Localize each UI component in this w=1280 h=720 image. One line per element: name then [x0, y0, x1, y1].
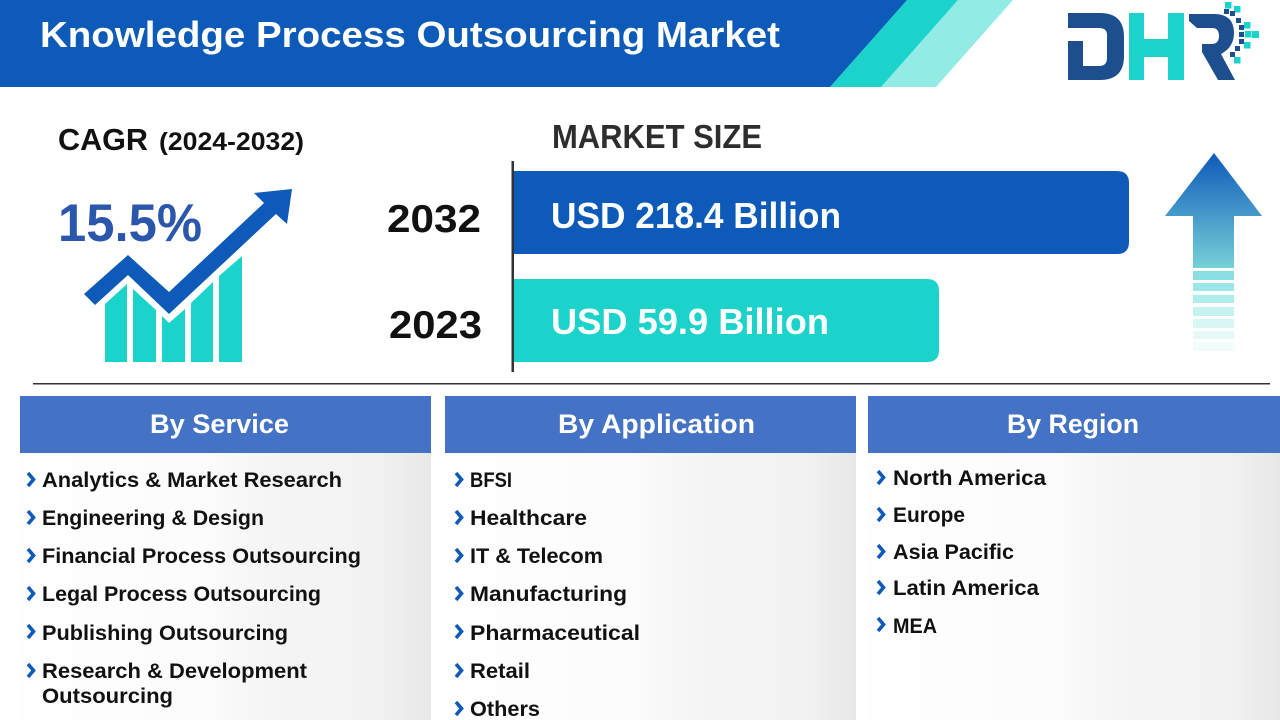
heading: by application: [445, 396, 856, 453]
bar 2032: USD 218.4 Billion: [551, 195, 841, 236]
panel: by application: [445, 396, 856, 720]
heading: by application: By Application: [558, 409, 755, 439]
logo letter H: [1129, 13, 1184, 80]
CAGR heading: CAGR: [58, 122, 148, 157]
item: publishing: Publishing Outsourcing: [42, 622, 288, 645]
item: pharmaceutical: Pharmaceutical: [470, 622, 640, 645]
item: engineering: Engineering & Design: [42, 507, 264, 530]
CAGR heading: [58, 122, 304, 157]
logo dots: [1224, 2, 1259, 64]
heading: by service: [20, 396, 431, 453]
icon bars: [105, 256, 242, 362]
icon trend arrow: [84, 189, 292, 314]
divider: [33, 383, 1270, 384]
item: legal: Legal Process Outsourcing: [42, 583, 321, 606]
item: europe: Europe: [893, 504, 965, 527]
year label 2032: 2032: [387, 198, 481, 241]
chart axis: [512, 161, 514, 372]
logo letter R: [1189, 14, 1235, 80]
logo: DHR: [1068, 2, 1259, 80]
heading: by service: By Service: [150, 409, 289, 439]
item: manufacturing: Manufacturing: [470, 583, 627, 606]
item: research: Outsourcing: [42, 685, 173, 708]
item: financial: Financial Process Outsourcing: [42, 545, 361, 568]
bar 2023: [513, 279, 939, 362]
item: bfsi: BFSI: [470, 469, 512, 492]
icon: growth up arrow: [1165, 153, 1262, 351]
CAGR heading: (2024-2032): [159, 128, 304, 156]
item: retail: Retail: [470, 660, 530, 683]
teal stripe: [830, 0, 958, 87]
item: research: [28, 660, 307, 708]
item: asia pacific: Asia Pacific: [893, 541, 1014, 564]
panel: by region: [868, 396, 1280, 720]
bar 2023: USD 59.9 Billion: [551, 301, 829, 342]
CAGR value: 15.5%: [58, 194, 202, 253]
item: bfsi: [456, 469, 512, 492]
item: healthcare: Healthcare: [470, 507, 587, 530]
blue banner: [0, 0, 907, 87]
year label 2023: 2023: [389, 304, 482, 347]
light teal stripe: [881, 0, 1013, 87]
panel: by service: [20, 396, 431, 720]
heading: by region: [868, 396, 1280, 453]
logo letter D: [1068, 13, 1124, 80]
heading: by region: By Region: [1007, 409, 1139, 439]
item: north america: North America: [893, 467, 1046, 490]
growth chart icon: [84, 189, 292, 362]
title: Knowledge Process Outsourcing Market: [40, 14, 780, 55]
item: mea: MEA: [893, 615, 937, 638]
item: latin america: Latin America: [893, 577, 1039, 600]
item: analytics: Analytics & Market Research: [42, 469, 342, 492]
item: research: Research & Development: [42, 660, 307, 683]
item: it telecom: IT & Telecom: [470, 545, 603, 568]
bar 2032: [513, 171, 1129, 254]
header banner: [0, 0, 1280, 88]
market size heading: MARKET SIZE: [552, 118, 762, 155]
